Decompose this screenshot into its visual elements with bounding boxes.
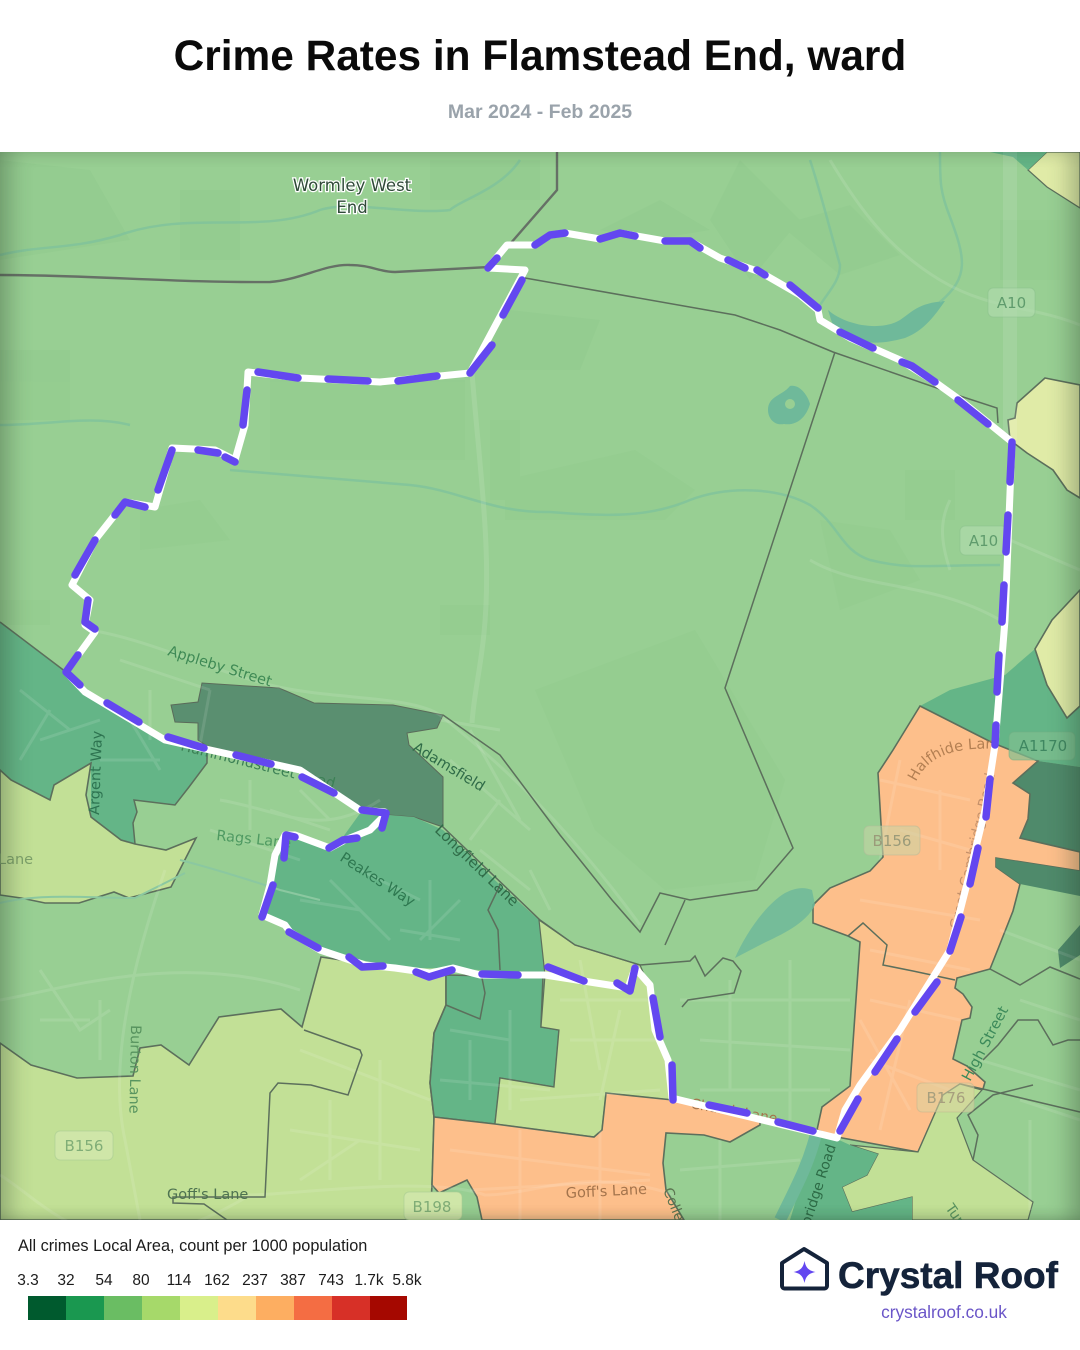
logo url: crystalroof.co.uk [881, 1302, 1007, 1322]
road label: A1170: A1170 [1019, 737, 1067, 755]
wordmark: Crystal Roof [838, 1255, 1058, 1296]
street labels: Peakes Way [337, 850, 418, 910]
road label: A10 north: A10 [997, 294, 1026, 312]
ward boundary: purple dashes [66, 233, 1012, 1131]
region: teal south-east strip [790, 1130, 912, 1220]
region: dark green band east [996, 858, 1080, 896]
street labels: Goff's Lane [565, 1182, 647, 1202]
map edge shading [0, 152, 1080, 1220]
text: 162 [204, 1272, 230, 1289]
road label: A10 south [960, 526, 1007, 555]
region: pale yellow north-east [1008, 378, 1080, 498]
text: 387 [280, 1272, 306, 1289]
text: 743 [318, 1272, 344, 1289]
subtitle: date range: Mar 2024 - Feb 2025 [448, 101, 632, 123]
region: teal north-east of orange [920, 649, 1080, 767]
road label: A1170 [1009, 732, 1075, 760]
road label: B156 east: B156 [873, 832, 911, 850]
road label: B156 west: B156 [65, 1137, 103, 1155]
boundary lines between areas [0, 278, 1080, 1220]
text: 237 [242, 1272, 268, 1289]
region: dark green high-contrast block [171, 683, 443, 827]
ward boundary: white casing [66, 233, 1012, 1138]
road label: B176 [917, 1083, 974, 1112]
street labels: Rags Lane [216, 828, 292, 852]
title: Crime Rates in Flamstead End, ward [174, 32, 906, 79]
place label: Wormley West End: End [336, 198, 368, 217]
road label: B198 [404, 1192, 462, 1220]
road label: A10 north [988, 288, 1035, 317]
road label: A10 south: A10 [969, 532, 998, 550]
top administrative boundary [0, 152, 557, 282]
street labels: Argent Way [87, 730, 106, 815]
street labels: Great Cambridge Road [947, 771, 999, 931]
place label: Wormley West End [293, 176, 412, 217]
region: teal block south [430, 975, 559, 1124]
legend: colour scale [28, 1296, 407, 1320]
legend title: All crimes Local Area, count per 1000 population [18, 1237, 367, 1255]
street labels: Longfield Lane [431, 821, 523, 910]
region: orange south [432, 1093, 760, 1220]
base area: main green [0, 152, 1080, 1220]
street labels: Burton Lane [125, 1025, 143, 1114]
text: 54 [95, 1272, 113, 1289]
region: pale green south-east [842, 1084, 1033, 1220]
region: pale green middle south [495, 920, 672, 1137]
road label: B176: B176 [927, 1089, 965, 1107]
region: dark green east [1013, 761, 1080, 854]
field patches [0, 160, 1060, 890]
place label: Wormley West End: Wormley West [293, 176, 412, 195]
street labels: Church Lane [689, 1096, 779, 1127]
region: teal west [0, 622, 209, 844]
region: teal strip far east [1058, 925, 1080, 968]
text: 5.8k [392, 1272, 422, 1289]
text: 80 [132, 1272, 150, 1289]
water: river and ponds [0, 152, 1000, 1220]
text: 1.7k [354, 1272, 384, 1289]
text: 3.3 [17, 1272, 39, 1289]
region: pale yellow east [1035, 590, 1080, 718]
region: light green south-west [0, 957, 446, 1220]
legend: scale values [17, 1272, 422, 1289]
street labels: High Street [959, 1004, 1012, 1084]
region: pale green west [0, 763, 196, 903]
street labels: Appleby Street [166, 644, 274, 690]
icon: house with star [780, 1247, 829, 1290]
road label: B198: B198 [413, 1198, 451, 1216]
text: 114 [167, 1272, 191, 1289]
road label: B156 east [864, 826, 920, 855]
map: crime rates choropleth [0, 152, 1080, 1220]
text: 32 [57, 1272, 75, 1289]
street labels: Goff's Lane [167, 1187, 248, 1203]
street labels: Hammondstreet Road [179, 738, 337, 792]
street labels: Adamsfield [410, 740, 487, 795]
logo: Crystal Roof [780, 1247, 1058, 1296]
region: teal corner north-east [990, 152, 1047, 170]
road label: B156 west [55, 1131, 113, 1160]
region: orange east [813, 706, 1080, 1152]
region: Peakes Way teal [262, 812, 545, 975]
region: corner north-east [1028, 152, 1080, 208]
